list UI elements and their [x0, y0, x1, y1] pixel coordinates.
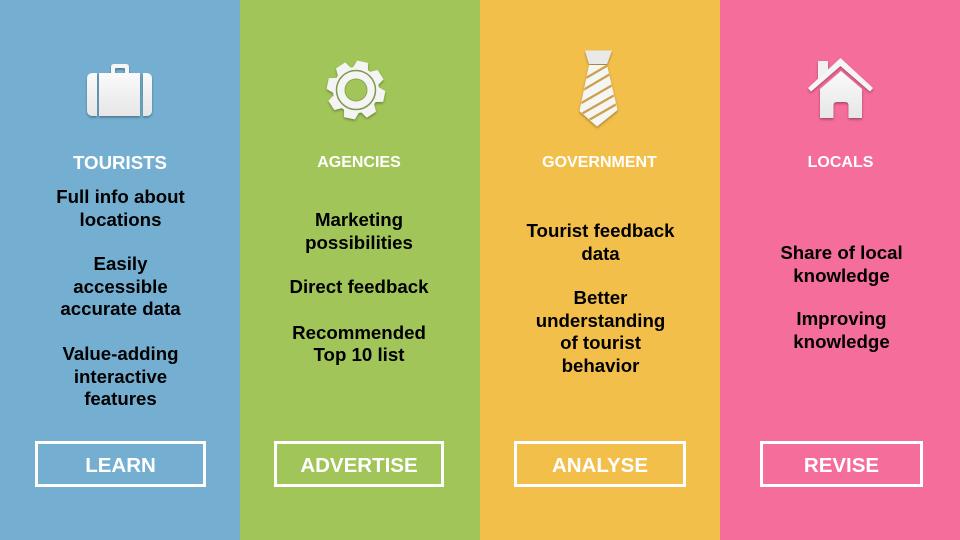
text: government benefits	[526, 220, 674, 376]
text: tourists benefits: locations Easily	[80, 209, 161, 274]
button: learn	[35, 441, 206, 487]
text: agencies benefits: Marketing	[315, 209, 403, 230]
panel: agencies	[240, 0, 480, 540]
text: locals benefits	[780, 242, 903, 352]
text: government benefits: understanding	[536, 310, 665, 331]
text: agencies benefits: possibilities Direct feedback Recommended	[290, 232, 428, 343]
heading: agencies: AGENCIES	[317, 154, 401, 171]
text: government benefits: Tourist feedback	[527, 220, 674, 241]
button: advertise: ADVERTISE	[300, 454, 418, 477]
panel: government	[480, 0, 720, 540]
button: learn: LEARN	[85, 454, 156, 477]
text: tourists benefits: accessible	[73, 276, 168, 297]
icon: gear	[326, 60, 386, 122]
button: advertise	[274, 441, 444, 487]
panel: locals	[720, 0, 960, 540]
icon: suitcase	[86, 64, 154, 119]
button: analyse	[514, 441, 686, 487]
icon: house	[807, 58, 874, 121]
text: government benefits: data Better	[574, 243, 627, 308]
heading: tourists: TOURISTS	[73, 152, 167, 173]
panel: tourists	[0, 0, 240, 540]
text: locals benefits: Share of local	[780, 242, 903, 263]
text: tourists benefits: Full info about	[56, 186, 185, 207]
button: revise	[760, 441, 923, 487]
text: tourists benefits	[56, 186, 185, 409]
heading: government: GOVERNMENT	[542, 154, 657, 171]
text: government benefits: of tourist	[560, 332, 641, 353]
icon: tie	[578, 50, 619, 129]
text: tourists benefits: features	[84, 388, 157, 409]
button: analyse: ANALYSE	[552, 454, 648, 477]
heading: locals: LOCALS	[808, 154, 873, 171]
text: locals benefits: knowledge Improving	[793, 265, 890, 329]
text: government benefits: behavior	[562, 355, 639, 376]
text: tourists benefits: interactive	[74, 366, 167, 387]
button: revise: REVISE	[804, 454, 879, 477]
text: tourists benefits: accurate data Value-adding	[60, 298, 181, 364]
text: locals benefits: knowledge	[793, 331, 890, 352]
text: agencies benefits: Top 10 list	[314, 344, 404, 365]
